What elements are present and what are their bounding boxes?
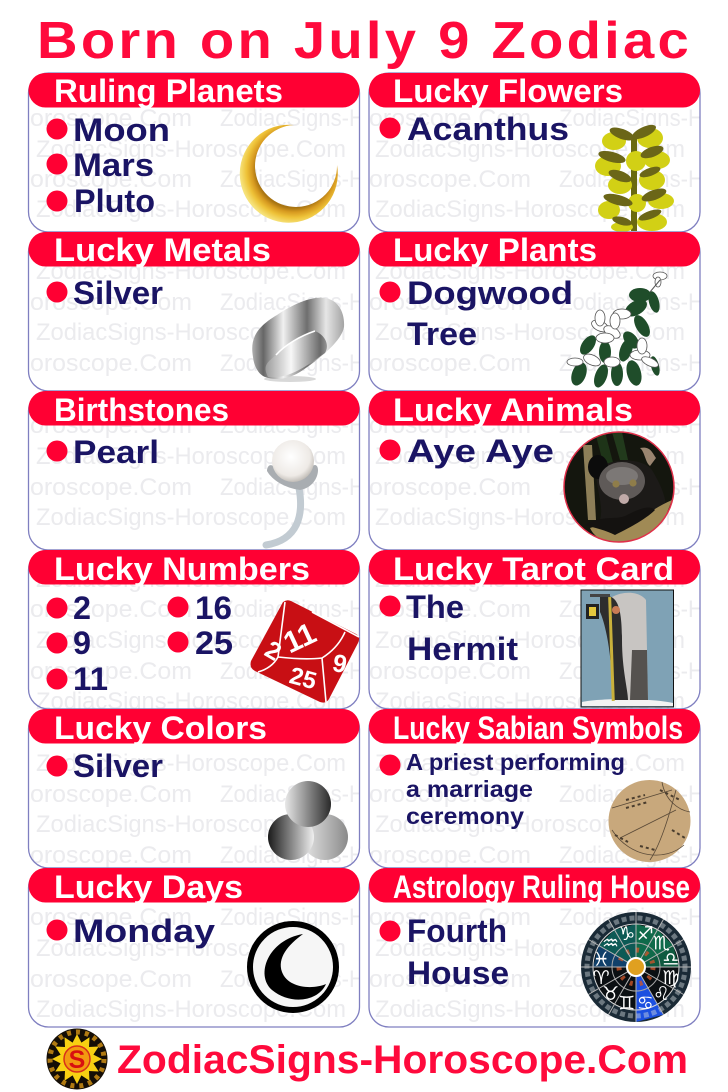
background watermark: ZodiacSigns-Horoscope.Com — [375, 566, 685, 593]
background watermark: ZodiacSigns-Horoscope.Com — [375, 443, 685, 470]
background watermark: ZodiacSigns-Horoscope.Com — [375, 196, 685, 223]
list: ruling house: Fourth — [407, 913, 507, 949]
list: ruling house — [380, 913, 509, 991]
background watermark: ZodiacSigns-H — [220, 658, 365, 685]
heading: lucky tarot card: Lucky Tarot Card — [393, 551, 674, 587]
panel: lucky animals — [369, 391, 700, 550]
zodiac symbols — [593, 923, 679, 1014]
background watermark: ZodiacSigns-H — [559, 474, 704, 501]
background watermark: ZodiacSigns-H — [220, 904, 365, 931]
background watermark: ZodiacSigns-H — [220, 105, 365, 132]
background watermark: oroscope.Com — [369, 166, 531, 193]
background watermark: ZodiacSigns-Horoscope.Com — [375, 627, 685, 654]
list: sabian symbol: ceremony — [406, 803, 524, 829]
panel: lucky flowers — [369, 73, 700, 232]
heading: lucky days: Lucky Days — [54, 869, 243, 905]
zodiac symbols: ♓︎ — [593, 948, 610, 970]
zodiac symbols: ♌︎ — [653, 983, 670, 1005]
background watermark: ZodiacSigns-H — [559, 166, 704, 193]
list: sabian symbol: A priest performing — [406, 749, 625, 775]
list: days: Monday — [73, 913, 215, 949]
list: tarot: Hermit — [407, 631, 518, 667]
background watermark: oroscope.Com — [30, 842, 192, 869]
background watermark: ZodiacSigns-Horoscope.Com — [375, 996, 685, 1023]
icon: aye-aye photo — [564, 432, 674, 544]
icon: hermit tarot card — [581, 590, 674, 707]
list: metals: Silver — [73, 275, 163, 311]
background watermark: ZodiacSigns-Horoscope.Com — [36, 258, 346, 285]
background watermark: ZodiacSigns-Horoscope.Com — [375, 258, 685, 285]
icon: pearl ring — [266, 440, 318, 545]
background watermark: oroscope.Com — [30, 350, 192, 377]
background watermark: ZodiacSigns-H — [559, 966, 704, 993]
background watermark: ZodiacSigns-H — [220, 966, 365, 993]
background watermark: oroscope.Com — [30, 412, 192, 439]
heading: lucky animals: Lucky Animals — [393, 392, 633, 428]
heading: ruling planets: Ruling Planets — [54, 73, 283, 109]
icon: red polyhedral die: 25 — [287, 662, 319, 695]
background watermark: ZodiacSigns-H — [559, 350, 704, 377]
background watermark: ZodiacSigns-H — [220, 350, 365, 377]
background watermark: ZodiacSigns-H — [559, 781, 704, 808]
background watermark: ZodiacSigns-H — [220, 166, 365, 193]
icon: silver overlapping circles — [268, 781, 348, 860]
panel: lucky numbers — [28, 550, 360, 709]
icon: red polyhedral die: 11 — [279, 617, 321, 660]
background watermark: ZodiacSigns-Horoscope.Com — [36, 566, 346, 593]
list: animals: Aye Aye — [407, 433, 554, 469]
background watermark: ZodiacSigns-Horoscope.Com — [36, 750, 346, 777]
list: ruling house: House — [407, 955, 509, 991]
panel: lucky days — [28, 868, 360, 1027]
background watermark: ZodiacSigns-H — [559, 105, 704, 132]
icon: red polyhedral die: 9 — [330, 649, 349, 679]
list: numbers: 16 — [195, 590, 232, 626]
list: tarot: The — [406, 589, 464, 625]
background watermark: ZodiacSigns-Horoscope.Com — [375, 811, 685, 838]
panel: astrology ruling house — [369, 868, 700, 1027]
background watermark: oroscope.Com — [369, 105, 531, 132]
zodiac symbols: ♉︎ — [602, 983, 619, 1005]
zodiac symbols: ♋︎ — [637, 992, 654, 1014]
icon: silver ring — [252, 298, 344, 382]
list: numbers: 9 — [73, 625, 91, 661]
background watermark: ZodiacSigns-H — [559, 904, 704, 931]
background watermark: ZodiacSigns-Horoscope.Com — [375, 688, 685, 715]
icon: golden crescent moon — [240, 125, 338, 223]
heading: lucky metals: Lucky Metals — [54, 232, 271, 268]
footer logo — [46, 1028, 108, 1090]
background watermark: oroscope.Com — [369, 289, 531, 316]
footer logo: S — [69, 1046, 85, 1074]
zodiac symbols: ♑︎ — [618, 923, 635, 945]
background watermark: oroscope.Com — [369, 474, 531, 501]
background watermark: oroscope.Com — [369, 904, 531, 931]
background watermark: ZodiacSigns-H — [220, 842, 365, 869]
background watermark: oroscope.Com — [369, 966, 531, 993]
icon: black crescent emblem — [250, 924, 336, 1010]
background watermark: ZodiacSigns-H — [559, 842, 704, 869]
background watermark: oroscope.Com — [369, 350, 531, 377]
background watermark: ZodiacSigns-H — [559, 596, 704, 623]
background watermark: oroscope.Com — [369, 842, 531, 869]
panel: ruling planets — [28, 73, 360, 232]
background watermark: oroscope.Com — [369, 412, 531, 439]
zodiac symbols: ♊︎ — [618, 992, 635, 1014]
list: colors: Silver — [73, 748, 163, 784]
background watermark: ZodiacSigns-H — [220, 289, 365, 316]
list: plants: Tree — [407, 316, 477, 352]
list: sabian symbol — [380, 749, 625, 829]
heading: lucky numbers: Lucky Numbers — [54, 551, 310, 587]
footer website name: ZodiacSigns-Horoscope.Com — [117, 1038, 688, 1082]
background watermark: ZodiacSigns-H — [220, 474, 365, 501]
background watermark: ZodiacSigns-H — [559, 289, 704, 316]
background watermark: ZodiacSigns-H — [220, 781, 365, 808]
panel: lucky colors — [28, 709, 360, 868]
background watermark: oroscope.Com — [30, 904, 192, 931]
icon: sabian chart disc — [608, 780, 690, 862]
background watermark: ZodiacSigns-H — [559, 412, 704, 439]
heading: lucky plants: Lucky Plants — [393, 232, 597, 268]
background watermark: ZodiacSigns-Horoscope.Com — [375, 750, 685, 777]
list: birthstones: Pearl — [73, 434, 159, 470]
background watermark — [30, 105, 704, 1023]
background watermark: oroscope.Com — [30, 474, 192, 501]
background watermark: ZodiacSigns-Horoscope.Com — [36, 627, 346, 654]
icon: red polyhedral die — [250, 600, 359, 703]
list: numbers — [46, 590, 233, 697]
icon: dogwood branch — [567, 272, 667, 389]
background watermark: oroscope.Com — [30, 105, 192, 132]
background watermark: oroscope.Com — [30, 781, 192, 808]
list: planets: Pluto — [74, 183, 155, 219]
background watermark: ZodiacSigns-H — [220, 412, 365, 439]
background watermark: oroscope.Com — [30, 596, 192, 623]
list: tarot — [380, 589, 518, 667]
background watermark: oroscope.Com — [30, 658, 192, 685]
list: flowers: Acanthus — [407, 111, 569, 147]
background watermark: oroscope.Com — [30, 166, 192, 193]
list: numbers: 2 — [73, 590, 91, 626]
panel: birthstones — [28, 391, 360, 550]
zodiac symbols: ♎︎ — [662, 948, 679, 970]
list: numbers: 25 — [195, 625, 233, 661]
background watermark: oroscope.Com — [30, 966, 192, 993]
heading: lucky flowers: Lucky Flowers — [393, 73, 623, 109]
background watermark: ZodiacSigns-H — [220, 596, 365, 623]
panel: lucky tarot card — [369, 550, 700, 709]
list: sabian symbol: a marriage — [406, 776, 533, 802]
title: Born on July 9 Zodiac — [37, 12, 692, 70]
list: birthstones — [46, 434, 159, 470]
background watermark: ZodiacSigns-Horoscope.Com — [375, 319, 685, 346]
heading: birthstones: Birthstones — [54, 392, 229, 428]
background watermark: ZodiacSigns-Horoscope.Com — [36, 443, 346, 470]
background watermark: ZodiacSigns-Horoscope.Com — [36, 688, 346, 715]
icon: red polyhedral die: 2 — [260, 635, 286, 667]
list: numbers: 11 — [73, 661, 108, 697]
heading: lucky colors: Lucky Colors — [54, 710, 267, 746]
background watermark: oroscope.Com — [369, 658, 531, 685]
background watermark: ZodiacSigns-Horoscope.Com — [36, 136, 346, 163]
list: plants — [380, 275, 573, 352]
list: planets — [46, 112, 170, 219]
panel: lucky plants — [369, 232, 700, 391]
list: planets: Moon — [73, 112, 170, 148]
background watermark: oroscope.Com — [369, 596, 531, 623]
background watermark: ZodiacSigns-Horoscope.Com — [36, 196, 346, 223]
background watermark: ZodiacSigns-Horoscope.Com — [36, 996, 346, 1023]
zodiac symbols: ♍︎ — [662, 967, 679, 989]
icon: zodiac wheel — [581, 912, 691, 1022]
zodiac symbols: ♏︎ — [653, 932, 670, 954]
zodiac symbols: ♈︎ — [593, 967, 610, 989]
background watermark: ZodiacSigns-Horoscope.Com — [375, 136, 685, 163]
list: plants: Dogwood — [407, 275, 573, 311]
zodiac symbols: ♒︎ — [602, 932, 619, 954]
background watermark: ZodiacSigns-H — [559, 658, 704, 685]
background watermark: ZodiacSigns-Horoscope.Com — [36, 811, 346, 838]
zodiac symbols: ♐︎ — [637, 923, 654, 945]
background watermark: oroscope.Com — [30, 289, 192, 316]
background watermark: ZodiacSigns-Horoscope.Com — [375, 935, 685, 962]
background watermark: ZodiacSigns-Horoscope.Com — [36, 504, 346, 531]
panel: lucky sabian symbols — [369, 709, 700, 868]
background watermark: oroscope.Com — [369, 781, 531, 808]
background watermark: ZodiacSigns-Horoscope.Com — [36, 935, 346, 962]
background watermark: ZodiacSigns-Horoscope.Com — [375, 504, 685, 531]
panel: lucky metals — [28, 232, 360, 391]
background watermark: ZodiacSigns-Horoscope.Com — [36, 319, 346, 346]
icon: acanthus flower — [595, 122, 674, 232]
list: planets: Mars — [73, 147, 154, 183]
